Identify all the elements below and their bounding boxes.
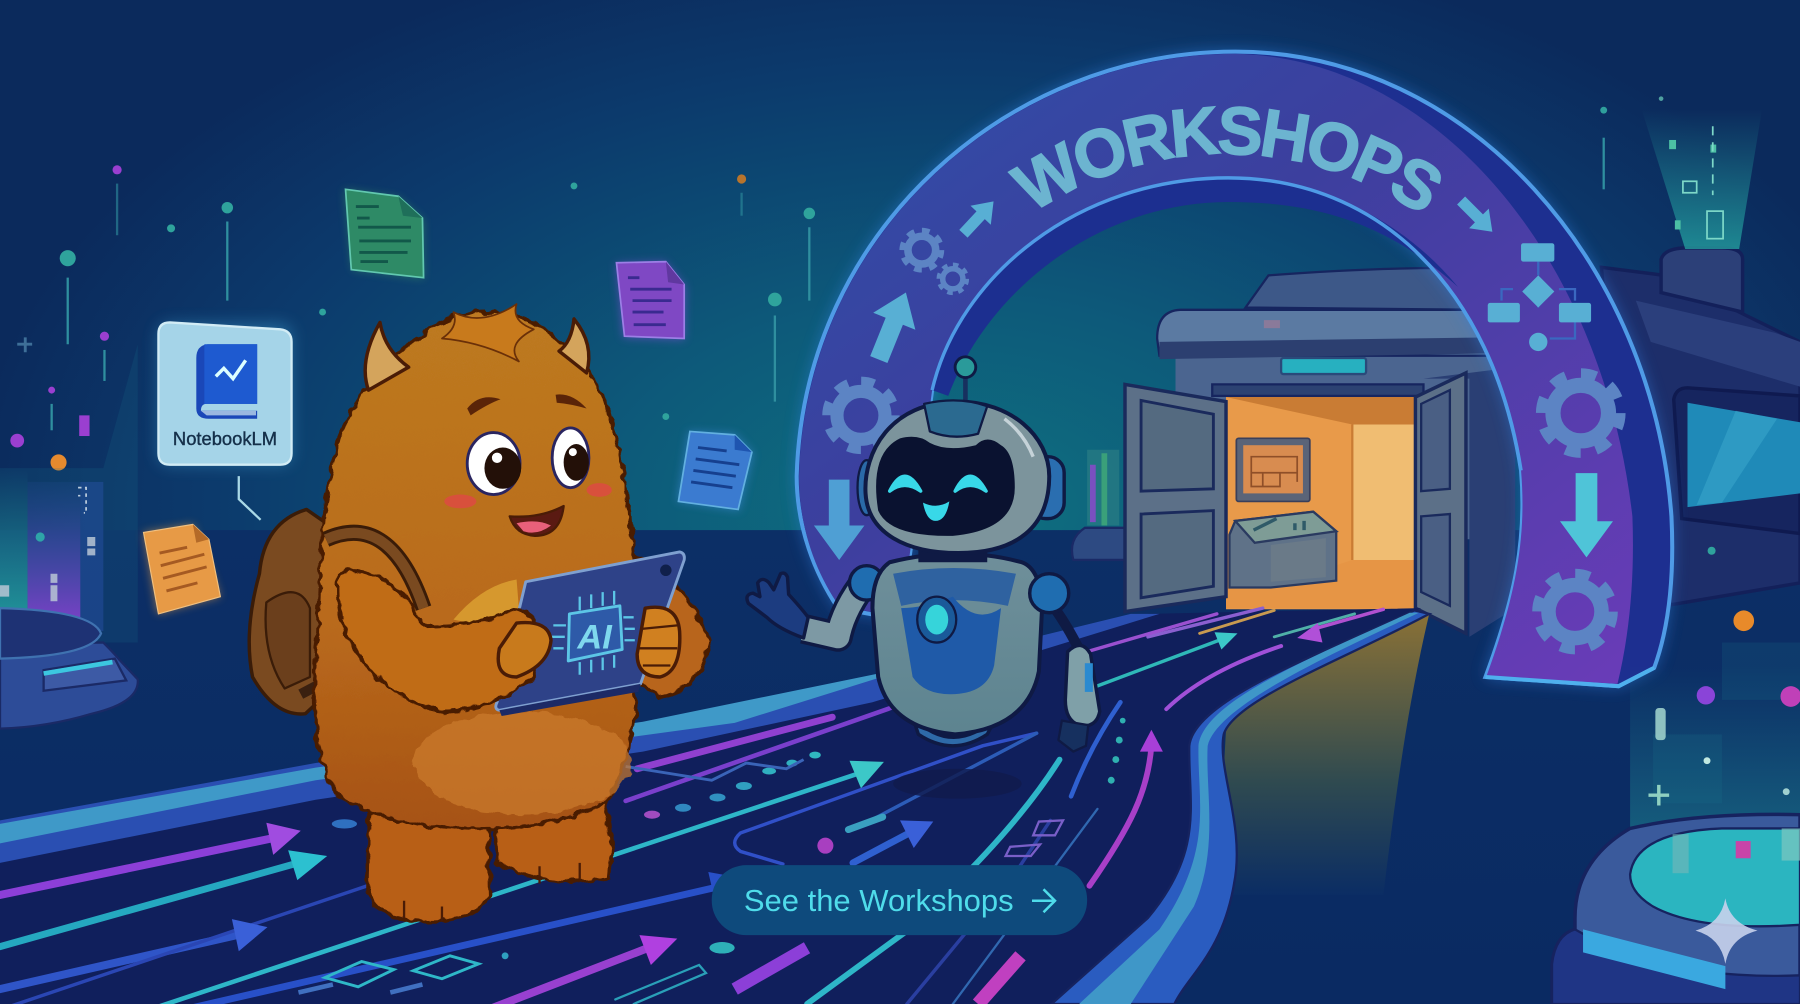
toe lines (404, 863, 580, 921)
right curb (1052, 610, 1429, 1004)
tablet (496, 552, 684, 716)
AI chip icon (551, 591, 635, 675)
road arrows (0, 702, 1151, 1004)
antenna (963, 376, 967, 404)
left door (1125, 384, 1226, 612)
left hand (498, 623, 551, 677)
right arm (1030, 574, 1100, 752)
document: green (344, 189, 424, 279)
arch icon: flowchart (1488, 243, 1591, 351)
sparkle mark (1696, 898, 1758, 964)
far road markings (1079, 608, 1383, 709)
backpack strap (326, 533, 424, 608)
left arm (338, 571, 549, 711)
road (0, 608, 1429, 1004)
arch icons: arrows (814, 191, 1613, 560)
document: orange (143, 524, 220, 614)
NotebookLM card: NotebookLM (173, 428, 277, 449)
control console (1229, 512, 1336, 587)
horns (365, 319, 589, 390)
face (444, 394, 612, 536)
neck (918, 539, 987, 562)
NotebookLM card (158, 322, 292, 465)
arch title: WORKSHOPS (1008, 106, 1441, 210)
button: see the workshops (712, 865, 1087, 935)
building (1125, 268, 1515, 637)
connector line under card (239, 476, 261, 520)
robot (747, 357, 1100, 799)
backpack (249, 509, 344, 714)
right door (1415, 373, 1466, 633)
monster (249, 304, 709, 922)
hair tuft (442, 304, 534, 361)
chest light (917, 597, 956, 643)
icon: book (196, 344, 257, 419)
right hand (637, 607, 680, 677)
shadow (893, 769, 1022, 799)
furry legs and body (314, 311, 638, 922)
arch sign (788, 42, 1682, 694)
hover skirt (913, 717, 996, 746)
right arm (631, 553, 709, 696)
arch icons: gears (827, 231, 1620, 649)
floating data dots and lines (10, 165, 815, 470)
torso (872, 554, 1042, 734)
road dots and chips (298, 718, 1126, 993)
right machine behind arch (1601, 248, 1800, 605)
left arm (747, 566, 884, 638)
teal beam above machine (1600, 96, 1762, 249)
AI chip icon: AI (576, 618, 613, 656)
road arrowheads (232, 623, 1322, 965)
door opening (1212, 384, 1423, 609)
chest tuft (453, 579, 519, 625)
document: purple (616, 262, 685, 340)
document: blue (677, 431, 753, 511)
left hologram pedestal (0, 344, 138, 729)
left curb (0, 614, 1159, 863)
robot eyes and smile (890, 476, 986, 521)
floor (0, 530, 1800, 1004)
background small pedestal (1072, 450, 1131, 560)
right bottom hologram pedestal (1552, 547, 1800, 1004)
screen on interior wall (1236, 438, 1310, 501)
button: see the workshops: See the Workshops (744, 883, 1014, 918)
head (858, 400, 1064, 553)
